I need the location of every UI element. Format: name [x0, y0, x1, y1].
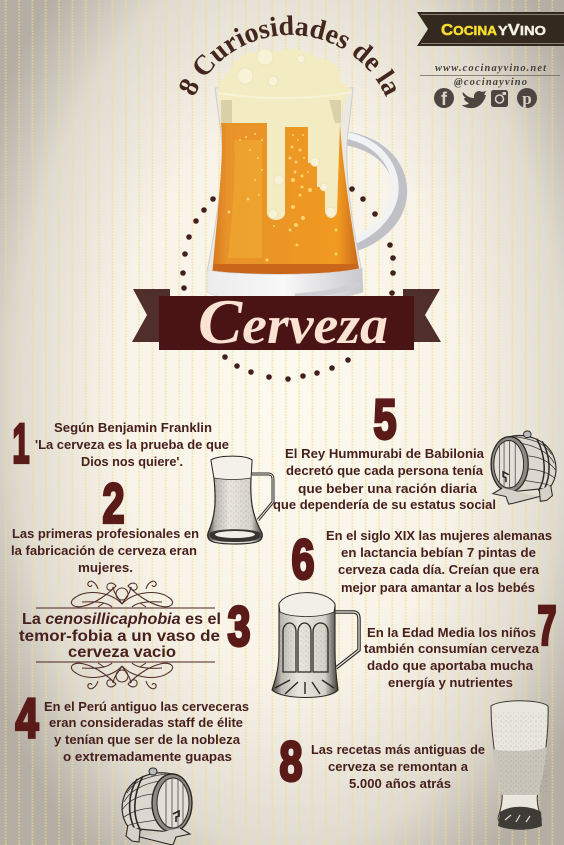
foam with drips: [218, 49, 352, 220]
beer bubbles: [228, 133, 338, 262]
dotted circle: [180, 186, 396, 382]
item 7: energía y nutrientes: [388, 676, 513, 690]
website and handle: @cocinayvino: [454, 77, 527, 88]
logo ribbon: Cocina y Vino: [417, 12, 564, 46]
item 6: cerveza cada día. Creían que era: [338, 563, 540, 577]
item 6: 6: [292, 528, 314, 590]
item 1: Según Benjamin Franklin: [54, 421, 212, 435]
beer mug illustration: [207, 49, 400, 302]
item 8: Las recetas más antiguas de: [311, 743, 485, 757]
icon: engraved pint glass: [491, 701, 548, 830]
icon: engraved mug 1: [208, 456, 273, 544]
item 4: o extremadamente guapas: [63, 750, 232, 764]
beer: [212, 123, 360, 275]
item 8: 8: [280, 730, 302, 792]
logo ribbon: Cocina y Vino: COCINA: [441, 22, 498, 39]
glass: [207, 88, 362, 272]
banner title: Cerveza: [198, 286, 388, 357]
item 8: [280, 730, 485, 792]
item 3 callout: [19, 581, 250, 689]
item 5: decretó que cada persona tenía: [286, 464, 484, 478]
icon: engraved mug 6: [272, 593, 359, 698]
mug handle: [345, 135, 400, 246]
item 3 callout: La cenosillicaphobia es el: [22, 611, 221, 628]
foam bubbles: [237, 49, 336, 218]
website and handle: [420, 63, 560, 88]
item 4: y tenían que ser de la nobleza: [54, 733, 241, 747]
item 1: 1: [12, 412, 30, 474]
item 7: también consumían cerveza: [364, 642, 540, 656]
item 4: [16, 686, 249, 764]
social icons: [434, 88, 537, 109]
item 8: 5.000 años atrás: [349, 777, 451, 791]
mug base: [207, 268, 363, 302]
title arc: 8 Curiosidades de la: [180, 15, 396, 97]
item 2: 2: [102, 472, 124, 534]
website and handle: www.cocinayvino.net: [435, 63, 547, 74]
item 2: Las primeras profesionales en: [12, 527, 199, 541]
item 5: [273, 388, 496, 512]
item 4: 4: [16, 686, 38, 750]
item 3 callout: 3: [228, 594, 250, 658]
item 7: [364, 594, 556, 690]
item 1: [12, 412, 229, 474]
logo ribbon: Cocina y Vino: YVINO: [498, 22, 546, 39]
ribbon banner: [132, 286, 441, 357]
item 2: mujeres.: [78, 561, 133, 575]
item 7: En la Edad Media los niños: [367, 626, 536, 640]
icon: barrel right: [491, 431, 556, 504]
item 6: [292, 528, 552, 595]
item 2: [11, 472, 199, 575]
item 3 callout: temor-fobia a un vaso de: [19, 628, 220, 645]
item 1: Dios nos quiere'.: [81, 455, 183, 469]
item 1: 'La cerveza es la prueba de que: [35, 438, 229, 452]
item 6: en lactancia bebían 7 pintas de: [341, 546, 536, 560]
item 4: En el Perú antiguo las cerveceras: [44, 700, 249, 714]
ornament top: [71, 581, 173, 607]
item 7: dado que aportaba mucha: [367, 659, 534, 673]
item 3 callout: cerveza vacio: [68, 644, 176, 661]
ornament bottom: [71, 663, 173, 689]
item 4: eran consideradas staff de élite: [49, 716, 243, 730]
social icons: f: [441, 89, 448, 109]
item 6: mejor para amantar a los bebés: [341, 581, 535, 595]
item 5: El Rey Hummurabi de Babilonia: [285, 447, 485, 461]
item 5: que beber una ración diaria: [298, 482, 478, 496]
item 8: cerveza se remontan a: [328, 760, 469, 774]
item 2: la fabricación de cerveza eran: [11, 544, 197, 558]
item 5: que dependería de su estatus social: [273, 498, 496, 512]
social icons: p: [522, 89, 532, 108]
item 5: 5: [374, 388, 396, 450]
icon: barrel bottom left: [122, 768, 192, 845]
item 6: En el siglo XIX las mujeres alemanas: [326, 529, 552, 543]
